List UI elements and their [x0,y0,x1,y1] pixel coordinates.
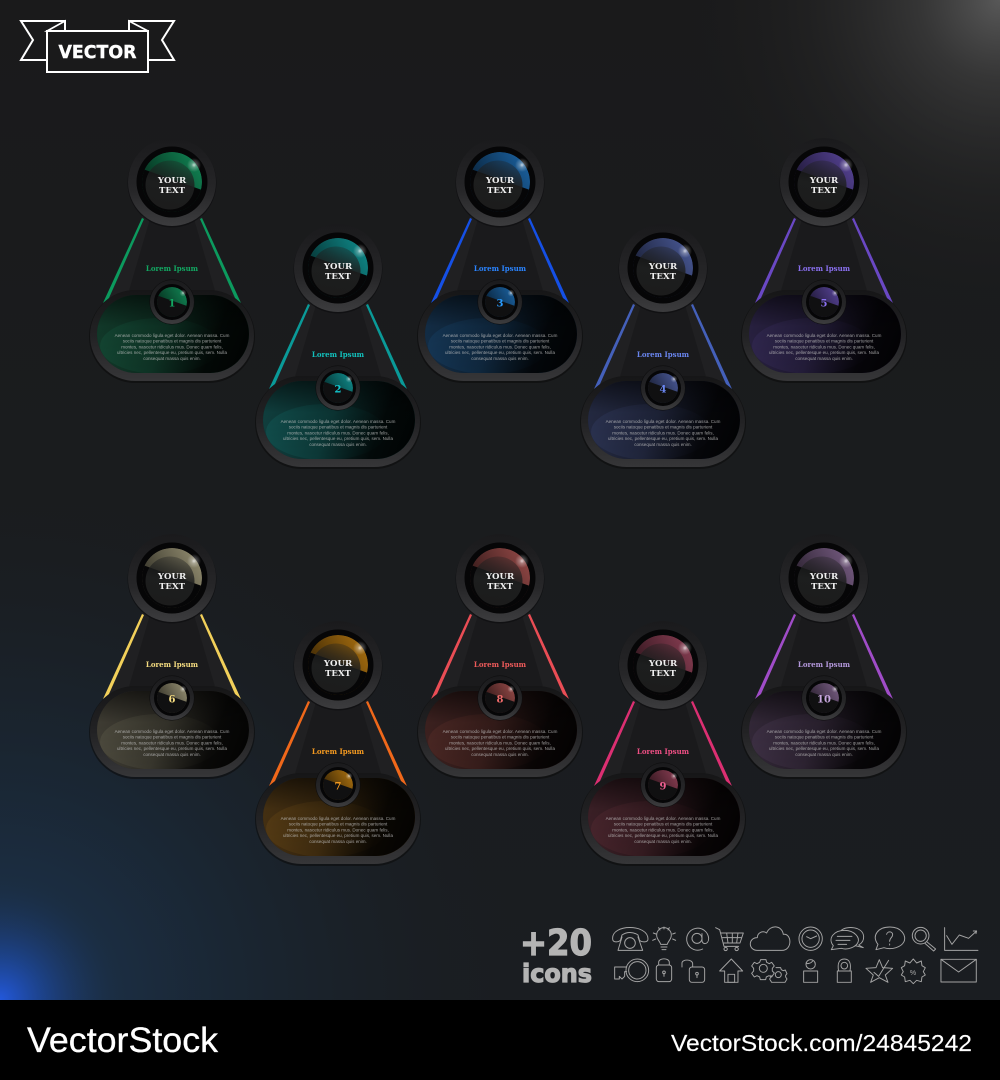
icon: star with check [866,960,893,982]
card 4 indigo: montes, nascetur ridiculus mus. Donec quam felis, [612,430,714,435]
card 7 orange: Aenean commodo ligula eget dolor. Aenean massa. Cum [281,816,396,821]
icon: at sign [687,928,709,950]
card 7 orange: consequat massa quis enim. [309,839,367,844]
card 8 red: Aenean commodo ligula eget dolor. Aenean massa. Cum [443,729,558,734]
card 8 red: montes, nascetur ridiculus mus. Donec quam felis, [449,740,551,745]
card 2 teal: YOUR [323,262,353,272]
footer url: VectorStock.com/24845242 [671,1030,972,1056]
card 10 purple [741,534,907,779]
card 7 orange [255,621,421,866]
card 8 red: consequat massa quis enim. [471,752,529,757]
card 8 red: TEXT [487,582,514,592]
card 3 blue: TEXT [487,186,514,196]
card 2 teal [255,224,421,469]
card 10 purple: montes, nascetur ridiculus mus. Donec quam felis, [773,740,875,745]
card 1 green: 1 [169,298,175,310]
icon: envelope [941,959,976,982]
card 9 pink: sociis natoque penatibus et magnis dis parturient [614,822,713,827]
card 8 red: 8 [497,694,504,706]
card 10 purple: Aenean commodo ligula eget dolor. Aenean massa. Cum [767,729,882,734]
icon: clock [799,927,822,950]
card 5 violet: YOUR [809,176,839,186]
icon: phone [613,927,648,950]
card 3 blue [417,138,583,383]
+20 icons heading [520,923,592,988]
icon: man [804,960,818,982]
card 2 teal: Aenean commodo ligula eget dolor. Aenean massa. Cum [281,419,396,424]
icon: house [720,959,743,982]
card 10 purple: TEXT [811,582,838,592]
card 3 blue: Aenean commodo ligula eget dolor. Aenean massa. Cum [443,333,558,338]
card 6 yellow: sociis natoque penatibus et magnis dis parturient [123,735,222,740]
card 7 orange: montes, nascetur ridiculus mus. Donec quam felis, [287,827,389,832]
card 8 red [417,534,583,779]
icon: question bubble [875,927,905,950]
icon: gears [752,960,787,982]
icon: woman [837,959,851,982]
card 4 indigo [580,224,746,469]
card 5 violet: 5 [821,298,828,310]
card 4 indigo: YOUR [648,262,678,272]
card 7 orange: YOUR [323,659,353,669]
card 4 indigo: Aenean commodo ligula eget dolor. Aenean massa. Cum [606,419,721,424]
card 6 yellow: montes, nascetur ridiculus mus. Donec quam felis, [121,740,223,745]
card 10 purple: sociis natoque penatibus et magnis dis parturient [775,735,874,740]
card 9 pink: ultricies nec, pellentesque eu, pretium quis, sem. Nulla [608,833,718,838]
card 6 yellow: YOUR [157,572,187,582]
icon: key [615,959,649,982]
+20 icons heading: icons [522,959,592,988]
card 5 violet [741,138,907,383]
card 7 text: Lorem Ipsum [312,747,365,756]
card 1 green: consequat massa quis enim. [143,356,201,361]
card 10 purple: 10 [817,694,831,706]
card 2 teal: ultricies nec, pellentesque eu, pretium quis, sem. Nulla [283,436,393,441]
card 5 violet: Aenean commodo ligula eget dolor. Aenean massa. Cum [767,333,882,338]
card 4 indigo: 4 [660,384,667,396]
card 9 pink: 9 [660,782,667,792]
card 3 blue: consequat massa quis enim. [471,356,529,361]
card 9 pink [580,621,746,866]
card 8 red: YOUR [485,572,515,582]
card 5 violet: TEXT [811,186,838,196]
card 4 indigo: sociis natoque penatibus et magnis dis parturient [614,425,713,430]
percent glyph in badge: % [910,970,916,977]
card 6 yellow [89,534,255,779]
icon: open lock [682,960,705,982]
card 4 indigo: TEXT [650,272,677,282]
card 8 red: sociis natoque penatibus et magnis dis parturient [451,735,550,740]
card 7 orange: sociis natoque penatibus et magnis dis parturient [289,822,388,827]
icon: line chart [945,928,978,950]
card 4 indigo: ultricies nec, pellentesque eu, pretium quis, sem. Nulla [608,436,718,441]
card 5 violet: ultricies nec, pellentesque eu, pretium quis, sem. Nulla [769,350,879,355]
card 1 text: Lorem Ipsum [146,264,199,273]
card 6 yellow: 6 [169,694,176,706]
card 5 violet: montes, nascetur ridiculus mus. Donec quam felis, [773,344,875,349]
card 1 green: montes, nascetur ridiculus mus. Donec quam felis, [121,344,223,349]
icon set [613,927,978,984]
card 2 teal: TEXT [325,272,352,282]
card 4 text: Lorem Ipsum [637,350,690,359]
card 5 text: Lorem Ipsum [798,264,851,273]
card 3 blue: 3 [497,298,504,310]
footer logo: VectorStock [27,1021,219,1060]
card 9 pink: Aenean commodo ligula eget dolor. Aenean massa. Cum [606,816,721,821]
card 9 pink: TEXT [650,669,677,679]
card 1 green [89,138,255,383]
card 2 teal: 2 [335,384,342,396]
vector ribbon badge [21,21,174,72]
card 4 indigo: consequat massa quis enim. [634,442,692,447]
card 8 red: ultricies nec, pellentesque eu, pretium quis, sem. Nulla [445,746,555,751]
card 5 violet: sociis natoque penatibus et magnis dis parturient [775,339,874,344]
card 3 blue: YOUR [485,176,515,186]
card 1 green: YOUR [157,176,187,186]
card 2 text: Lorem Ipsum [312,350,365,359]
card 6 text: Lorem Ipsum [146,660,199,669]
icon: shopping cart [716,928,743,951]
card 2 teal: consequat massa quis enim. [309,442,367,447]
card 9 pink: montes, nascetur ridiculus mus. Donec quam felis, [612,827,714,832]
card 7 orange: ultricies nec, pellentesque eu, pretium quis, sem. Nulla [283,833,393,838]
card 6 yellow: Aenean commodo ligula eget dolor. Aenean massa. Cum [115,729,230,734]
card 8 text: Lorem Ipsum [474,660,527,669]
card 7 orange: 7 [335,782,342,792]
card 2 teal: sociis natoque penatibus et magnis dis parturient [289,425,388,430]
card 1 green: TEXT [159,186,186,196]
card 1 green: ultricies nec, pellentesque eu, pretium quis, sem. Nulla [117,350,227,355]
card 2 teal: montes, nascetur ridiculus mus. Donec quam felis, [287,430,389,435]
icon: light bulb [653,927,676,950]
card 6 yellow: TEXT [159,582,186,592]
+20 icons heading: +20 [520,923,592,964]
card 3 text: Lorem Ipsum [474,264,527,273]
card 3 blue: sociis natoque penatibus et magnis dis parturient [451,339,550,344]
card 6 yellow: ultricies nec, pellentesque eu, pretium quis, sem. Nulla [117,746,227,751]
card 9 pink: consequat massa quis enim. [634,839,692,844]
card 10 purple: YOUR [809,572,839,582]
card 1 green: Aenean commodo ligula eget dolor. Aenean massa. Cum [115,333,230,338]
icon: magnifier [912,927,936,951]
card 1 green: sociis natoque penatibus et magnis dis parturient [123,339,222,344]
card 7 orange: TEXT [325,669,352,679]
card 10 text: Lorem Ipsum [798,660,851,669]
icon: percent badge [901,959,925,984]
card 3 blue: ultricies nec, pellentesque eu, pretium quis, sem. Nulla [445,350,555,355]
card 9 text: Lorem Ipsum [637,747,690,756]
icon: lock [656,959,672,982]
card 6 yellow: consequat massa quis enim. [143,752,201,757]
footer band [0,1000,1000,1080]
vector ribbon badge: VECTOR [58,42,137,63]
card 3 blue: montes, nascetur ridiculus mus. Donec quam felis, [449,344,551,349]
card 5 violet: consequat massa quis enim. [795,356,853,361]
icon: chat bubbles [831,928,864,950]
card 9 pink: YOUR [648,659,678,669]
card 10 purple: ultricies nec, pellentesque eu, pretium quis, sem. Nulla [769,746,879,751]
card 10 purple: consequat massa quis enim. [795,752,853,757]
icon: cloud [750,927,790,950]
